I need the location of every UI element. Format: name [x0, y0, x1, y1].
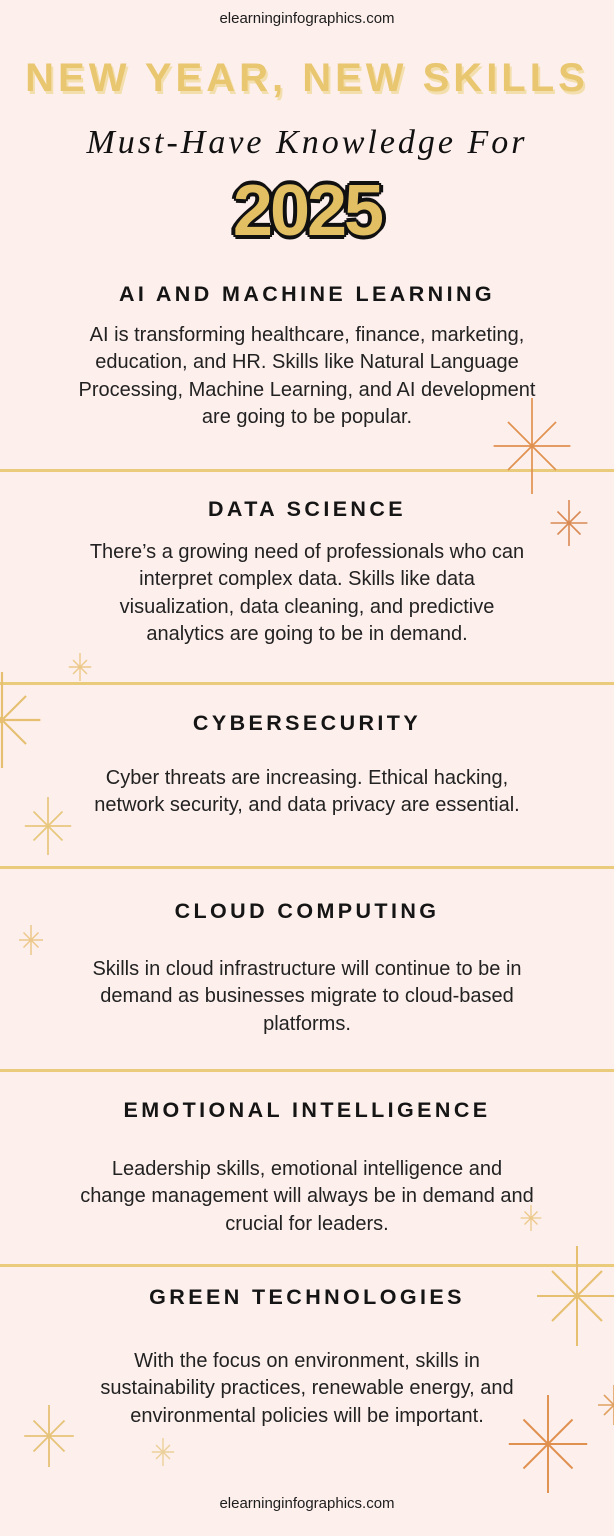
body: AI: AI is transforming healthcare, finance, marketing, — [90, 324, 524, 346]
year 2025 badge: 2025 — [233, 171, 381, 251]
heading: EI: EMOTIONAL INTELLIGENCE — [123, 1098, 491, 1122]
icon: big gold sparkle left — [0, 672, 40, 768]
icon: gold sparkle green top — [537, 1246, 614, 1346]
section: cybersecurity — [94, 711, 520, 816]
body: EI — [80, 1158, 534, 1235]
heading: cybersecurity: CYBERSECURITY — [193, 711, 421, 735]
body: data science: There’s a growing need of professionals who can — [90, 541, 524, 563]
body: data science: interpret complex data. Skills like data — [139, 568, 475, 590]
section: cloud computing — [92, 899, 522, 1035]
heading: data science: DATA SCIENCE — [208, 497, 406, 521]
body: AI: Processing, Machine Learning, and AI development — [79, 379, 535, 401]
section: emotional intelligence — [80, 1098, 534, 1235]
body: EI: Leadership skills, emotional intelligence and — [112, 1158, 502, 1180]
heading: green: GREEN TECHNOLOGIES — [149, 1285, 465, 1309]
section: green technologies — [100, 1285, 514, 1427]
body: data science: analytics are going to be in demand. — [146, 623, 468, 645]
title: NEW YEAR, NEW SKILLS — [25, 56, 589, 100]
body: green: With the focus on environment, skills in — [134, 1350, 480, 1372]
icon: gold sparkle cyber — [25, 797, 71, 855]
icon: gold sparkle green left — [24, 1405, 74, 1467]
body: data science — [90, 541, 524, 645]
icon: tiny sparkle EI — [521, 1205, 541, 1231]
heading: cloud: CLOUD COMPUTING — [175, 899, 439, 923]
header url: elearninginfographics.com — [219, 10, 395, 27]
section: AI and machine learning — [79, 282, 536, 428]
icon: tiny sparkle green — [152, 1438, 174, 1466]
body: cloud — [92, 958, 522, 1035]
body: green: environmental policies will be important. — [130, 1405, 484, 1427]
body: EI: change management will always be in demand and — [80, 1185, 534, 1207]
body: cloud: platforms. — [263, 1013, 351, 1035]
icon: partial sparkle right edge — [598, 1385, 614, 1425]
body: green — [100, 1350, 514, 1427]
body: AI: are going to be popular. — [202, 406, 412, 428]
subtitle script: Must-Have Knowledge For — [86, 124, 528, 161]
body: cybersecurity: network security, and data privacy are essential. — [94, 794, 520, 816]
icon: tiny sparkle cloud — [19, 925, 43, 955]
heading: AI: AI AND MACHINE LEARNING — [119, 282, 495, 306]
icon: small orange sparkle — [551, 500, 587, 546]
body: green: sustainability practices, renewable energy, and — [100, 1377, 514, 1399]
body: EI: crucial for leaders. — [225, 1213, 389, 1235]
icon: orange sparkle AI — [494, 398, 570, 494]
body: cybersecurity — [94, 767, 520, 816]
footer url: elearninginfographics.com — [219, 1495, 395, 1512]
icon: orange sparkle bottom right — [509, 1395, 587, 1493]
body: AI — [79, 324, 536, 428]
section: data science — [90, 497, 524, 645]
body: cloud: demand as businesses migrate to cloud-based — [100, 985, 514, 1007]
body: cybersecurity: Cyber threats are increasing. Ethical hacking, — [106, 767, 508, 789]
body: data science: visualization, data cleaning, and predictive — [120, 596, 494, 618]
body: AI: education, and HR. Skills like Natural Language — [95, 351, 519, 373]
body: cloud: Skills in cloud infrastructure will continue to be in — [92, 958, 522, 980]
icon: tiny sparkle data — [69, 653, 91, 681]
